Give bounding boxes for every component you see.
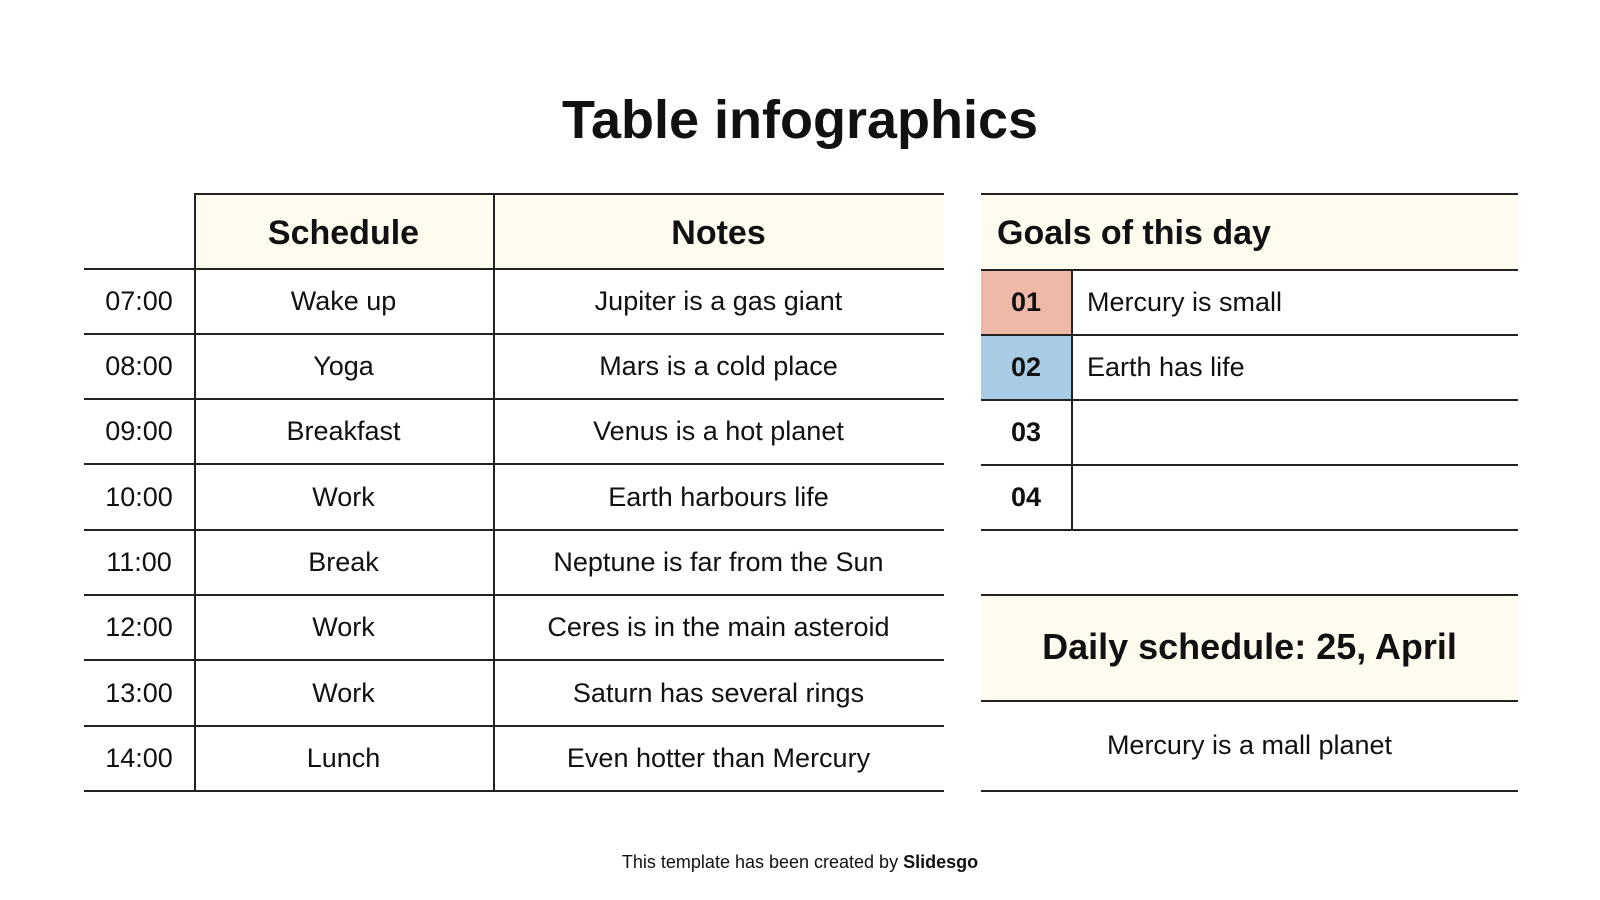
heading: Goals of this day	[997, 214, 1271, 252]
rows: Saturn has several rings	[573, 678, 864, 708]
rows: Break	[308, 547, 379, 577]
rows: 11:00	[106, 547, 172, 577]
panel: goals of this day: 04	[1011, 482, 1041, 512]
panel: goals of this day: 03	[1011, 417, 1041, 447]
rows: Earth harbours life	[608, 482, 829, 512]
panel: daily schedule: Daily schedule: 25, April	[1042, 626, 1457, 667]
rows: Breakfast	[286, 416, 401, 446]
panel: daily schedule: Mercury is a mall planet	[1107, 730, 1392, 760]
rows: Work	[312, 612, 375, 642]
rows: 12:00	[105, 612, 173, 642]
panel: goals of this day: 01	[1011, 287, 1041, 317]
panel: goals of this day	[981, 193, 1518, 531]
rows: 08:00	[105, 351, 173, 381]
rows: Ceres is in the main asteroid	[547, 612, 890, 642]
rows: Venus is a hot planet	[593, 416, 844, 446]
rows: 07:00	[105, 286, 173, 316]
rows	[105, 286, 890, 773]
panel: goals of this day: Mercury is small	[1087, 287, 1282, 317]
title: Table infographics	[562, 90, 1038, 150]
rows: Even hotter than Mercury	[567, 743, 870, 773]
rows: 14:00	[105, 743, 173, 773]
rows: Work	[312, 678, 375, 708]
panel: daily schedule	[981, 594, 1518, 792]
rows: 09:00	[105, 416, 173, 446]
panel: goals of this day: 02	[1011, 352, 1041, 382]
rows: Wake up	[291, 286, 396, 316]
rows: Mars is a cold place	[599, 351, 838, 381]
panel: schedule table	[84, 193, 944, 792]
rows: 13:00	[105, 678, 173, 708]
rows: Work	[312, 482, 375, 512]
header: Schedule: Schedule	[268, 214, 419, 252]
rows: Neptune is far from the Sun	[553, 547, 884, 577]
header: Notes: Notes	[671, 214, 766, 252]
rows: 10:00	[105, 482, 173, 512]
rows: Jupiter is a gas giant	[595, 286, 842, 316]
panel: goals of this day: Earth has life	[1087, 352, 1245, 382]
footer credit: Slidesgo	[903, 852, 978, 872]
footer credit: This template has been created by	[622, 852, 898, 872]
rows: Lunch	[307, 743, 380, 773]
rows: Yoga	[313, 351, 374, 381]
